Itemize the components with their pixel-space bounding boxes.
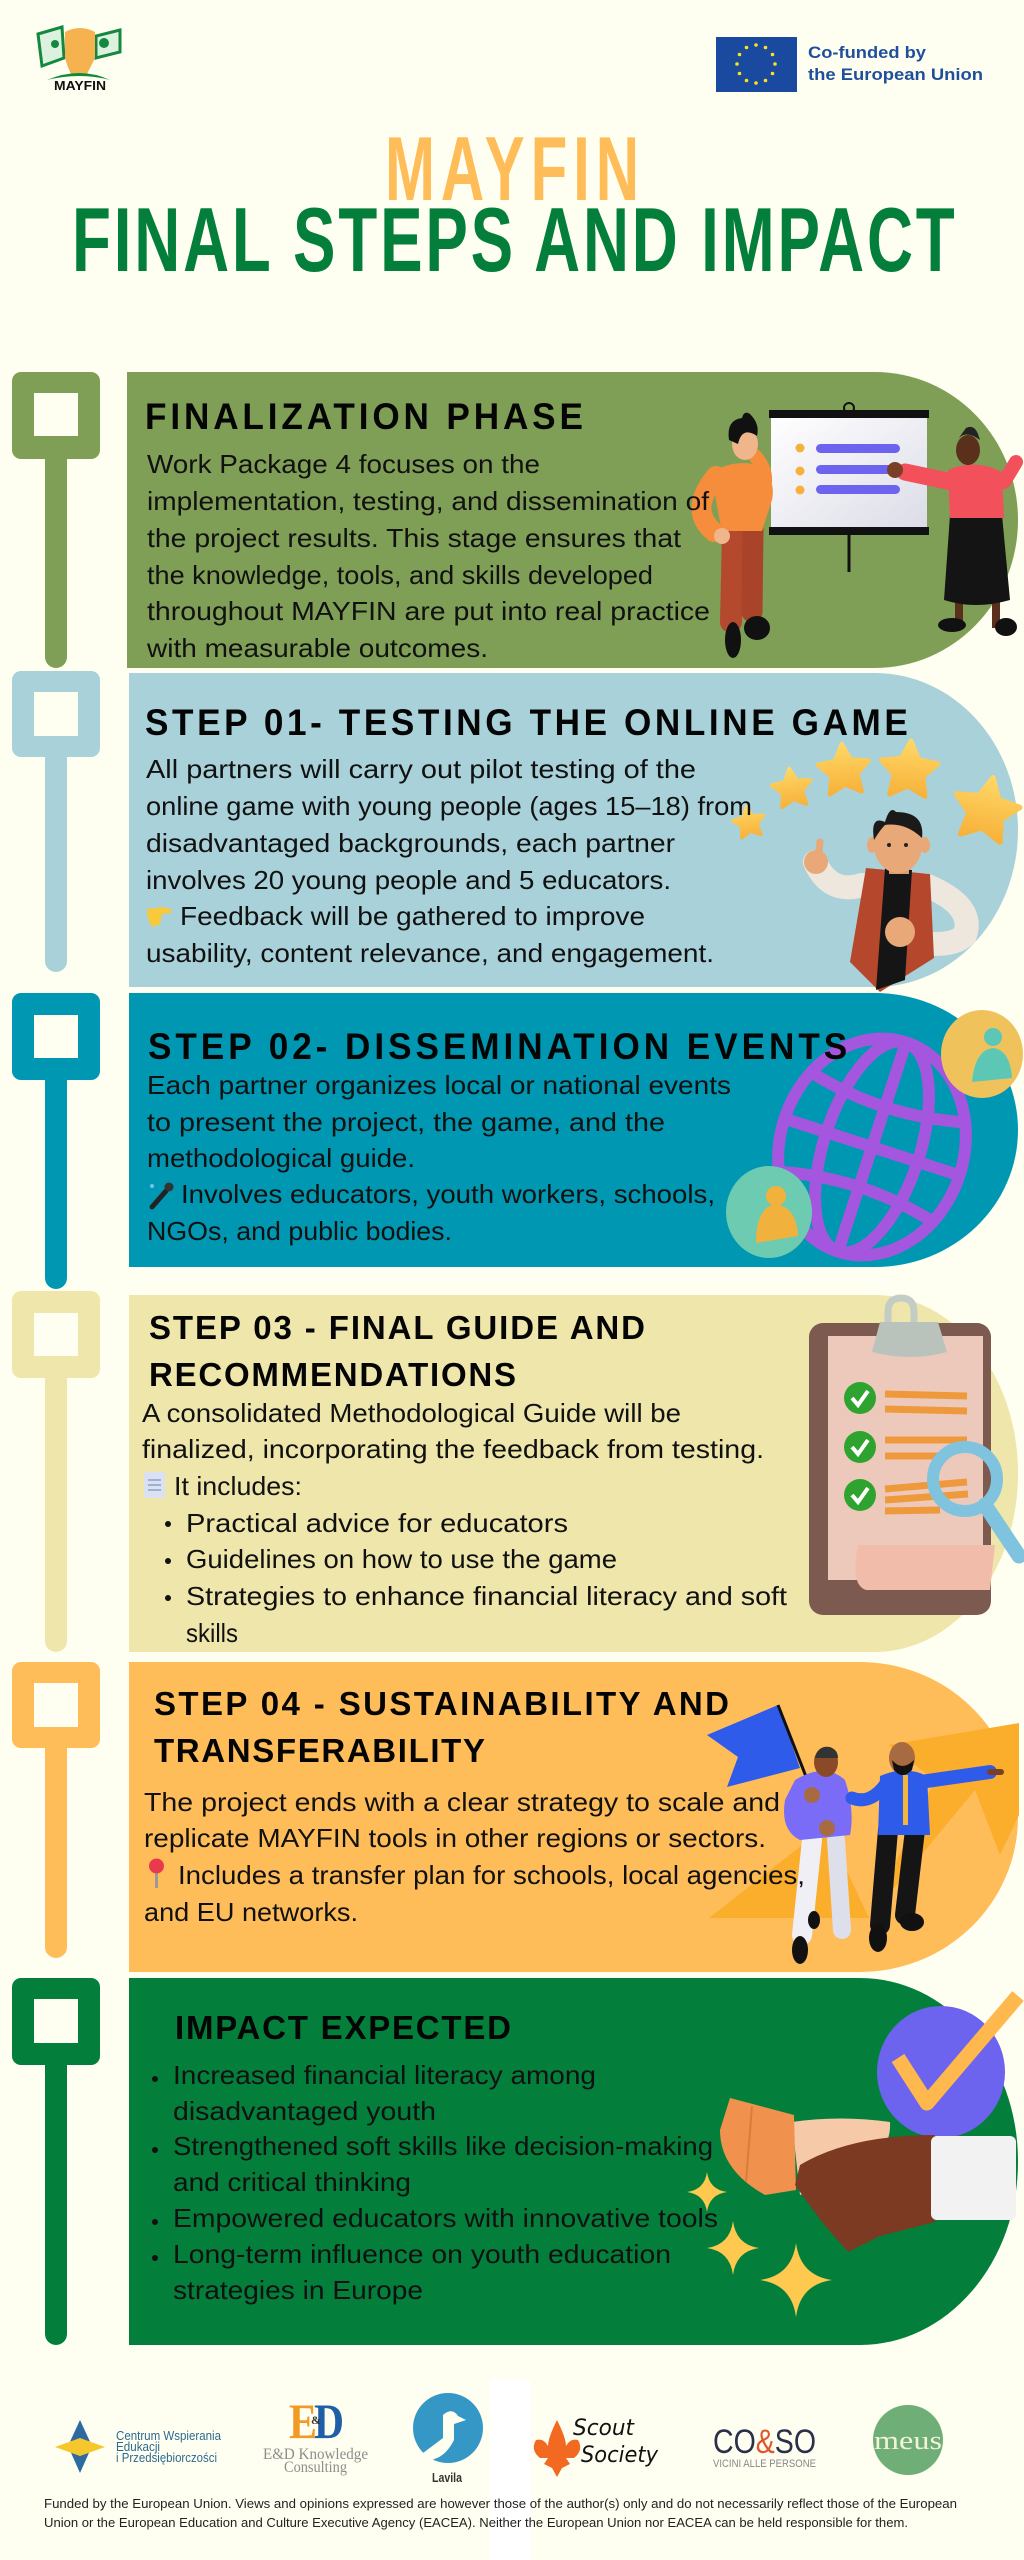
logo: E&D knowledge consulting: & xyxy=(311,2413,321,2427)
text block: finalization phase: the project results. This stage ensures that xyxy=(147,523,682,553)
text block: finalization phase: implementation, testing, and dissemination of xyxy=(147,486,710,516)
panel: step 01 testing the online game xyxy=(129,673,1024,992)
icon: man with thumbs up xyxy=(804,810,967,992)
logo: CO&SO: CO&SO xyxy=(713,2423,816,2461)
title: FINAL STEPS AND IMPACT xyxy=(72,189,955,291)
text block: step 02: methodological guide. xyxy=(147,1143,415,1173)
text block: step 03: Practical advice for educators xyxy=(186,1508,568,1538)
icon: rising arrow xyxy=(709,1723,1019,1918)
timeline marker 4 xyxy=(12,1291,100,1652)
text block: step 04 xyxy=(144,1787,805,1927)
logo: centrum wspierania edukacji: Edukacji xyxy=(116,2439,160,2454)
text block: finalization phase: throughout MAYFIN are put into real practice xyxy=(147,596,710,626)
text block: finalization phase: the knowledge, tools, and skills developed xyxy=(147,560,653,590)
text block: impact list: strategies in Europe xyxy=(173,2275,423,2305)
heading: step 04: TRANSFERABILITY xyxy=(154,1732,485,1769)
text block: step 03: Guidelines on how to use the game xyxy=(186,1544,617,1574)
panel: step 03 final guide and recommendations xyxy=(129,1295,1019,1652)
text block: step 03: A consolidated Methodological Guide will be xyxy=(142,1398,681,1428)
text block: step 02: Each partner organizes local or national events xyxy=(147,1070,731,1100)
logo: E&D knowledge consulting xyxy=(263,2393,368,2476)
heading: step 02: STEP 02- DISSEMINATION EVENTS xyxy=(148,1025,847,1067)
text block: step 01: disadvantaged backgrounds, each partner xyxy=(146,828,675,858)
text block: impact list: Long-term influence on youth education xyxy=(173,2239,671,2269)
text block: impact list: Strengthened soft skills like decision-making xyxy=(173,2131,713,2161)
logo: co-funded by the European Union: Co-funded by xyxy=(808,43,927,62)
text block: step 01: All partners will carry out pilot testing of the xyxy=(146,754,696,784)
title: MAYFIN xyxy=(385,119,639,220)
logo: centrum wspierania edukacji xyxy=(55,2420,222,2473)
logo: co-funded by the European Union xyxy=(716,37,983,92)
icon: presentation board xyxy=(769,403,929,572)
text block: step 02: Involves educators, youth workers, schools, xyxy=(181,1179,715,1209)
icon: clipboard with checklist xyxy=(809,1298,1019,1615)
text block: step 03: finalized, incorporating the feedback from testing. xyxy=(142,1434,764,1464)
timeline marker 1 xyxy=(12,372,100,668)
icon: rating stars xyxy=(730,739,1024,845)
icon: teal coin with person xyxy=(726,1166,812,1258)
icon: person left xyxy=(701,413,773,658)
footer disclaimer xyxy=(44,2496,957,2530)
logo: Lavila xyxy=(413,2393,483,2485)
text block: finalization phase xyxy=(146,449,710,663)
text block: step 03: Strategies to enhance financial literacy and soft xyxy=(186,1581,788,1611)
panel: impact expected xyxy=(129,1978,1018,2345)
text block: step 04: replicate MAYFIN tools in other regions or sectors. xyxy=(144,1823,766,1853)
logo: E&D knowledge consulting: E&D Knowledge xyxy=(263,2446,368,2463)
timeline marker 2 xyxy=(12,671,100,972)
text block: step 02: to present the project, the game, and the xyxy=(147,1107,665,1137)
logo: centrum wspierania edukacji: i Przedsiębiorczości xyxy=(116,2450,217,2465)
logo: centrum wspierania edukacji: Centrum Wspierania xyxy=(116,2428,222,2443)
text block: step 03: skills xyxy=(186,1618,238,1648)
text block: step 02: NGOs, and public bodies. xyxy=(147,1216,452,1246)
footer disclaimer: Union or the European Education and Culture Executive Agency (EACEA). Neither the European Union nor EACEA can be held responsible for them. xyxy=(44,2515,908,2530)
title xyxy=(72,119,955,291)
icon: pointing hand xyxy=(147,907,171,927)
logo: scout society xyxy=(534,2416,659,2477)
heading: step 04 xyxy=(154,1685,729,1769)
text block: step 03 xyxy=(142,1398,788,1648)
text block: step 01: online game with young people (ages 15–18) from xyxy=(146,791,752,821)
panel: step 04 sustainability and transferability xyxy=(129,1662,1019,1972)
icon: two people with flag xyxy=(707,1705,1001,1964)
icon: yellow coin with person xyxy=(941,1010,1023,1098)
heading: step 03: RECOMMENDATIONS xyxy=(149,1356,516,1393)
icon: sparkles xyxy=(687,2172,832,2317)
heading: finalization phase: FINALIZATION PHASE xyxy=(145,395,583,437)
logo: meus: meus xyxy=(874,2426,942,2455)
logo: scout society: Society xyxy=(581,2443,659,2468)
logo: E&D knowledge consulting: Consulting xyxy=(284,2459,347,2476)
logo: MAYFIN xyxy=(38,27,120,93)
logo: E&D knowledge consulting: E xyxy=(289,2393,317,2449)
icon: pin xyxy=(149,1858,164,1888)
heading: step 01: STEP 01- TESTING THE ONLINE GAME xyxy=(145,701,908,743)
text block: impact list: and critical thinking xyxy=(173,2167,411,2197)
panel: step 02 dissemination events xyxy=(129,993,1023,1280)
logo: Lavila: Lavila xyxy=(432,2470,463,2485)
text block: impact list: Increased financial literacy among xyxy=(173,2060,596,2090)
icon: document xyxy=(144,1472,165,1498)
text block: step 04: The project ends with a clear strategy to scale and xyxy=(144,1787,780,1817)
text block: step 01: usability, content relevance, and engagement. xyxy=(146,938,714,968)
text block: step 02 xyxy=(147,1070,731,1246)
heading: step 04: STEP 04 - SUSTAINABILITY AND xyxy=(154,1685,729,1722)
heading: impact expected: IMPACT EXPECTED xyxy=(175,2009,511,2046)
text block: step 01: involves 20 young people and 5 educators. xyxy=(146,865,671,895)
text block: finalization phase: with measurable outcomes. xyxy=(146,633,488,663)
logo: scout society: Scout xyxy=(573,2416,635,2441)
icon: person right xyxy=(887,427,1017,636)
text block: impact list: Empowered educators with innovative tools xyxy=(173,2203,718,2233)
icon: microphone xyxy=(150,1182,174,1207)
text block: step 04: Includes a transfer plan for schools, local agencies, xyxy=(178,1860,805,1890)
footer disclaimer: Funded by the European Union. Views and opinions expressed are however those of the author(s) only and do not necessarily reflect those of the European xyxy=(44,2496,957,2511)
text block: step 01 xyxy=(146,754,752,968)
text block: finalization phase: Work Package 4 focuses on the xyxy=(147,449,540,479)
text block: step 04: and EU networks. xyxy=(144,1897,358,1927)
icon: check badge xyxy=(877,1996,1018,2138)
text block: impact list: disadvantaged youth xyxy=(173,2096,436,2126)
logo: co-funded by the European Union: the European Union xyxy=(808,65,983,84)
logo: E&D knowledge consulting: D xyxy=(314,2393,344,2449)
logo: MAYFIN: MAYFIN xyxy=(54,78,106,93)
timeline marker 5 xyxy=(12,1662,100,1958)
panel: finalization phase xyxy=(127,372,1018,668)
timeline marker 3 xyxy=(12,993,100,1289)
logo: meus xyxy=(873,2405,943,2475)
white strip behind partner logos xyxy=(490,2380,531,2560)
logo: CO&SO: VICINI ALLE PERSONE xyxy=(713,2458,816,2470)
text block: step 01: Feedback will be gathered to improve xyxy=(180,901,645,931)
timeline marker 6 xyxy=(12,1978,100,2345)
text block: step 03: It includes: xyxy=(174,1471,302,1501)
icon: handshake xyxy=(720,2098,1016,2252)
text block: impact list xyxy=(152,2060,718,2305)
icon: globe xyxy=(751,1014,993,1280)
heading: step 03 xyxy=(149,1309,645,1393)
heading: step 03: STEP 03 - FINAL GUIDE AND xyxy=(149,1309,645,1346)
